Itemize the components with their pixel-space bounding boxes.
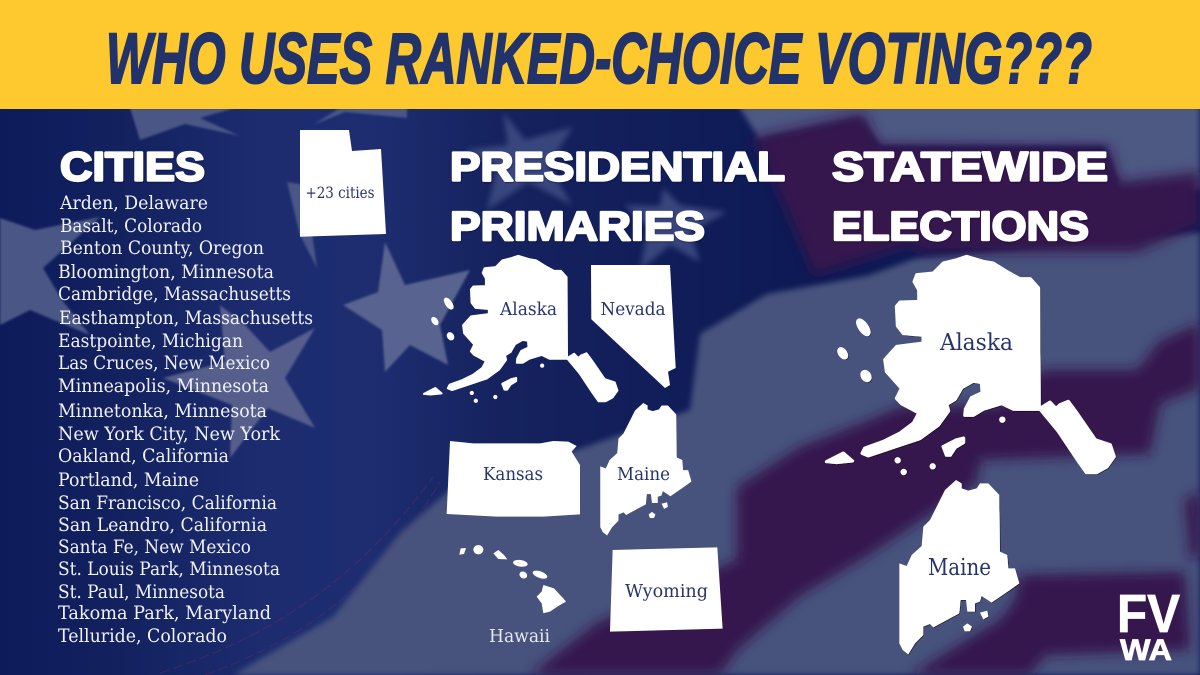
heading: statewide elections: STATEWIDE <box>832 144 1108 190</box>
list of cities: St. Louis Park, Minnesota <box>58 559 280 580</box>
list of cities <box>58 193 313 647</box>
map: Kansas <box>447 441 580 517</box>
heading: presidential primaries <box>450 144 785 249</box>
list of cities: Benton County, Oregon <box>60 238 264 259</box>
map: Hawaii: Hawaii <box>489 627 550 647</box>
list of cities: Eastpointe, Michigan <box>58 331 243 352</box>
map: Maine large <box>899 480 1019 654</box>
icon: Utah shape with +23 cities <box>300 130 386 237</box>
heading: statewide elections <box>832 144 1108 249</box>
logo: FV WA: FV <box>1117 584 1180 644</box>
list of cities: Takoma Park, Maryland <box>58 603 271 624</box>
list of cities: Portland, Maine <box>58 470 199 491</box>
list of cities: Minnetonka, Minnesota <box>58 401 267 422</box>
heading: statewide elections: ELECTIONS <box>832 203 1089 249</box>
heading: presidential primaries: PRESIDENTIAL <box>450 144 785 190</box>
map: Maine: Maine <box>617 465 670 485</box>
logo: FV WA: WA <box>1120 634 1172 667</box>
map: Nevada <box>591 265 676 388</box>
list of cities: Santa Fe, New Mexico <box>58 537 251 558</box>
title banner <box>0 0 1200 109</box>
icon: Utah shape with +23 cities: +23 cities <box>306 183 374 202</box>
panel: cities <box>58 130 386 647</box>
map: Maine <box>600 403 691 535</box>
heading: cities: CITIES <box>60 144 205 190</box>
heading: presidential primaries: PRIMARIES <box>450 203 705 249</box>
list of cities: Minneapolis, Minnesota <box>58 376 269 397</box>
map: Hawaii <box>459 545 566 647</box>
list of cities: Basalt, Colorado <box>60 216 202 237</box>
map: Kansas: Kansas <box>483 465 543 485</box>
list of cities: St. Paul, Minnesota <box>58 582 225 603</box>
list of cities: San Francisco, California <box>58 493 277 514</box>
map: Maine large: Maine <box>928 555 991 581</box>
map: Wyoming: Wyoming <box>625 582 708 602</box>
list of cities: Telluride, Colorado <box>58 626 227 647</box>
list of cities: New York City, New York <box>58 424 281 445</box>
list of cities: Bloomington, Minnesota <box>58 262 274 283</box>
list of cities: Oakland, California <box>58 446 229 467</box>
map: Nevada: Nevada <box>600 300 666 320</box>
map: Wyoming <box>610 547 723 632</box>
map: Alaska large <box>826 256 1114 474</box>
list of cities: Arden, Delaware <box>59 193 208 214</box>
list of cities: Cambridge, Massachusetts <box>58 284 291 305</box>
logo: FV WA <box>1117 584 1180 667</box>
list of cities: San Leandro, California <box>58 515 267 536</box>
list of cities: Easthampton, Massachusetts <box>59 308 313 329</box>
list of cities: Las Cruces, New Mexico <box>58 353 270 374</box>
panel: presidential primaries <box>424 144 785 647</box>
map: Alaska large: Alaska <box>939 330 1013 356</box>
panel: statewide elections <box>826 144 1114 654</box>
map: Alaska <box>424 256 617 402</box>
map: Alaska: Alaska <box>499 300 557 320</box>
